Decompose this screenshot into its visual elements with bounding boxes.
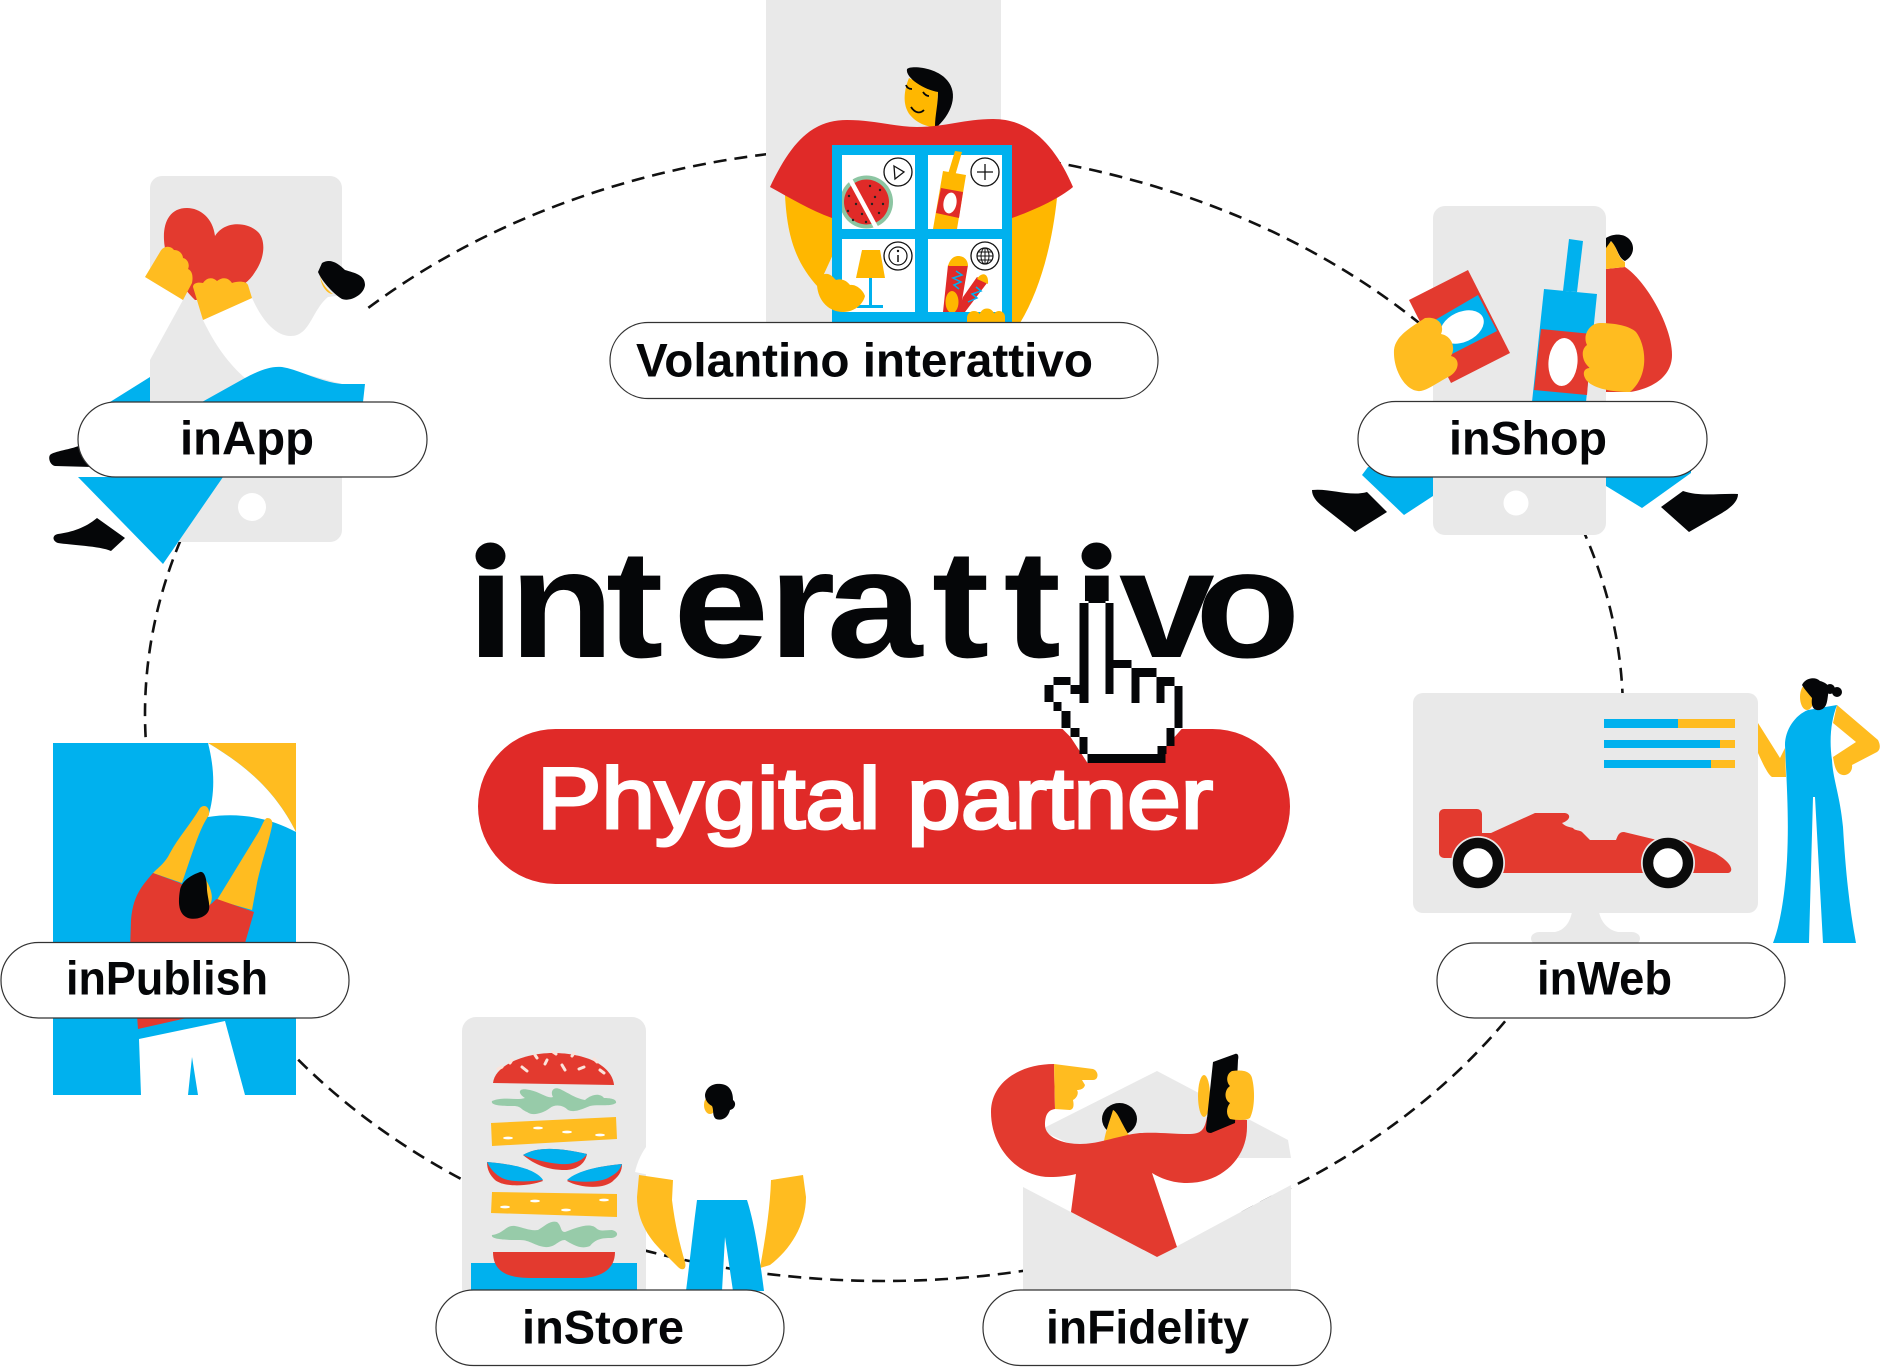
icon: pixel pointer hand bbox=[1044, 595, 1182, 763]
label: inPublish bbox=[1, 942, 349, 1018]
label: inPublish: inPublish bbox=[66, 952, 268, 1004]
illustration: inWeb bbox=[1413, 678, 1880, 945]
label: inShop bbox=[1358, 402, 1707, 477]
label: inStore bbox=[436, 1290, 784, 1366]
badge: Phygital partner bbox=[478, 729, 1290, 884]
label: inStore: inStore bbox=[522, 1300, 684, 1354]
label: inShop: inShop bbox=[1449, 412, 1607, 464]
label: inWeb bbox=[1437, 943, 1785, 1018]
label: inApp bbox=[78, 402, 427, 477]
illustration: inFidelity bbox=[991, 1054, 1291, 1290]
dashed ring connecting the services bbox=[145, 147, 1623, 1281]
illustration: inStore bbox=[462, 1017, 808, 1302]
badge: Phygital partner: Phygital partner bbox=[537, 751, 1213, 847]
illustration: inApp bbox=[49, 176, 377, 564]
illustration: inShop bbox=[1312, 206, 1738, 535]
label: inApp: inApp bbox=[180, 412, 314, 464]
logo: interattivo: interattivo bbox=[467, 518, 1300, 690]
illustration: inPublish bbox=[53, 743, 296, 1095]
label: inWeb: inWeb bbox=[1537, 952, 1672, 1004]
illustration: Volantino interattivo bbox=[766, 0, 1073, 325]
label: Volantino interattivo: Volantino interattivo bbox=[636, 334, 1093, 386]
label: Volantino interattivo bbox=[610, 322, 1158, 398]
label: inFidelity bbox=[983, 1290, 1331, 1366]
label: inFidelity: inFidelity bbox=[1046, 1300, 1249, 1354]
